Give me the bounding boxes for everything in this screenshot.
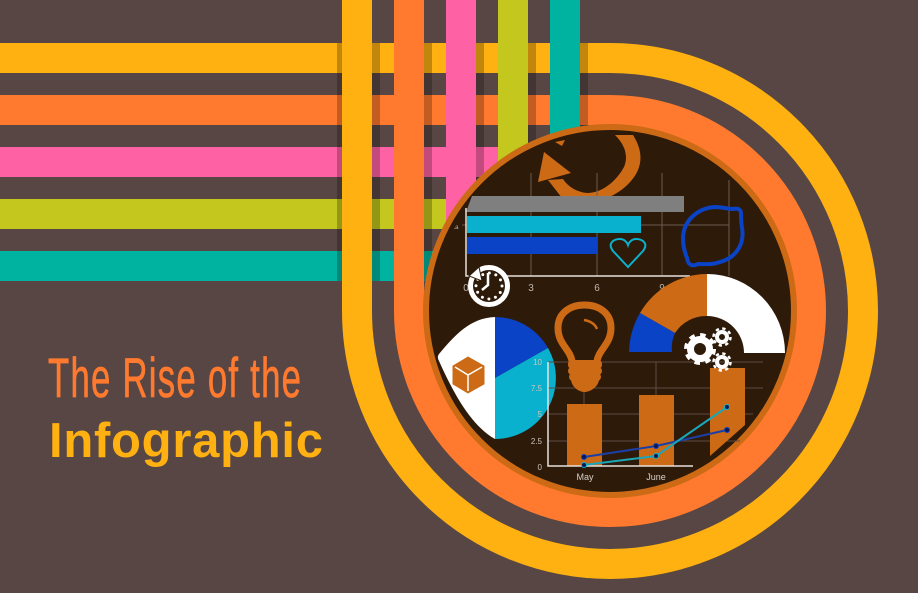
title: Infographic bbox=[49, 414, 323, 468]
column and line chart: May bbox=[576, 472, 594, 482]
bar chart: horizontal bars: 0 bbox=[463, 283, 469, 294]
column and line chart: 5 bbox=[538, 410, 543, 419]
bar chart: horizontal bars: 3 bbox=[528, 283, 534, 294]
bar chart: horizontal bars: .a bbox=[453, 225, 459, 231]
icon: clock with back arrow bbox=[469, 267, 508, 304]
bar chart: horizontal bars: 6 bbox=[594, 283, 600, 294]
central circle panel bbox=[426, 127, 794, 495]
icon: lemon outline bbox=[683, 207, 743, 265]
icon: circular arrow bbox=[538, 135, 640, 198]
pie chart bbox=[438, 317, 556, 439]
column and line chart: 0 bbox=[538, 463, 543, 472]
column and line chart: 10 bbox=[533, 358, 543, 367]
gauge chart bbox=[629, 274, 785, 353]
icon: gears bbox=[686, 328, 730, 370]
icon: heart outline bbox=[611, 239, 645, 267]
bar chart: horizontal bars bbox=[453, 173, 729, 294]
column and line chart: June bbox=[646, 472, 666, 482]
bar chart: horizontal bars: 9 bbox=[659, 283, 665, 294]
icon: light bulb bbox=[558, 305, 611, 392]
title bbox=[48, 347, 323, 468]
yellow looping ribbon bbox=[357, 0, 863, 564]
vertical ribbons bbox=[446, 0, 580, 300]
column and line chart bbox=[531, 358, 763, 482]
icon: box bbox=[453, 357, 484, 393]
title: The Rise of the bbox=[48, 347, 301, 409]
orange looping ribbon bbox=[409, 0, 811, 512]
column and line chart: 2.5 bbox=[531, 437, 543, 446]
column and line chart: 7.5 bbox=[531, 384, 543, 393]
horizontal ribbons bbox=[0, 43, 610, 281]
